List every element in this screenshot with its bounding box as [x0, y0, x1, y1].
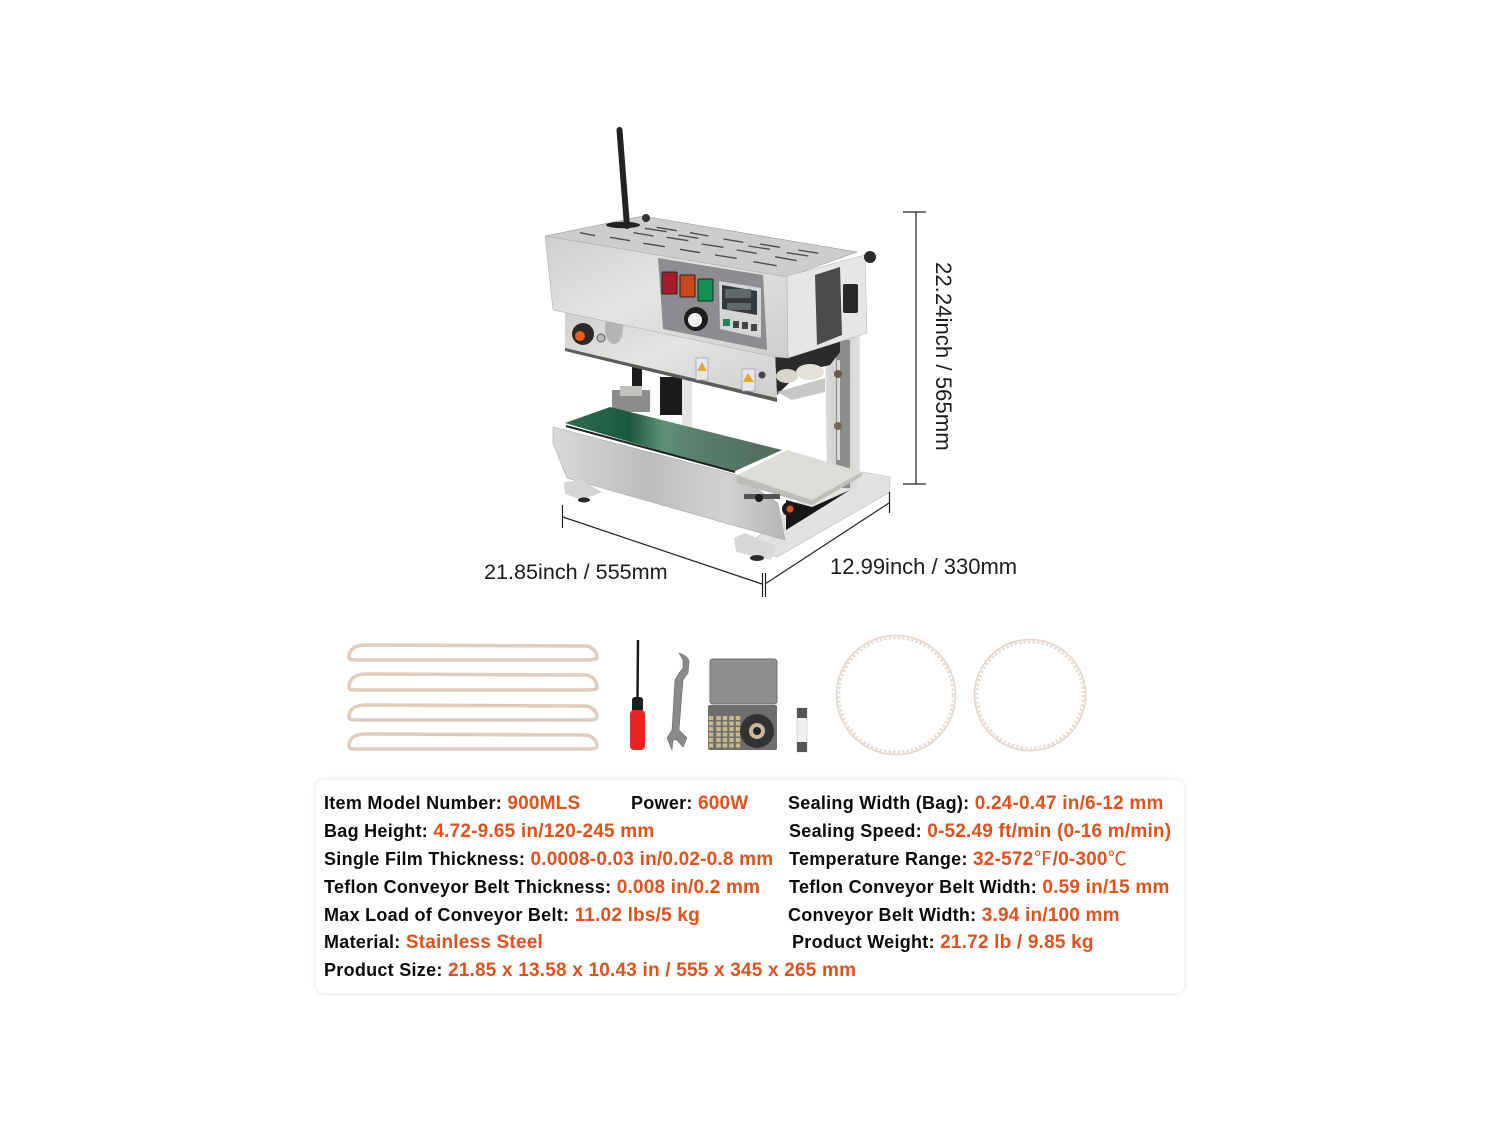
- spec: sealing speed: Sealing Speed: 0-52.49 ft/min (0-16 m/min): [789, 821, 1171, 842]
- spec: product weight: Product Weight: 21.72 lb / 9.85 kg: [792, 932, 1094, 953]
- heat roller assembly: [775, 337, 840, 400]
- accessory: wrench: [667, 653, 689, 750]
- conveyor side body: [553, 427, 785, 540]
- temperature controller: [719, 281, 761, 338]
- antenna rod: [620, 130, 627, 226]
- smudge on lower panel: [605, 312, 623, 344]
- spec: bag height: Bag Height: 4.72-9.65 in/120-245 mm: [324, 821, 654, 842]
- dimension: length: [484, 505, 762, 597]
- roller knob and switch box: [744, 490, 850, 530]
- right end face: [787, 255, 867, 358]
- machine: band sealer: [545, 130, 890, 561]
- heat switch: [680, 275, 695, 297]
- feed table: [737, 450, 862, 505]
- rear column and gear: [612, 367, 692, 428]
- control panel: [658, 258, 767, 350]
- spec: item model number: Item Model Number: 900MLS: [324, 793, 580, 814]
- accessory: type set box: [708, 659, 777, 750]
- accessory: small timing belt: [974, 640, 1086, 750]
- spec: sealing width: Sealing Width (Bag): 0.24-0.47 in/6-12 mm: [788, 793, 1164, 814]
- spec: film thickness: Single Film Thickness: 0.0008-0.03 in/0.02-0.8 mm: [324, 849, 773, 870]
- specification card: [316, 780, 1184, 993]
- right support column: [825, 335, 860, 490]
- spec: material: Material: Stainless Steel: [324, 932, 543, 953]
- rear knob: [864, 251, 876, 263]
- accessory: fuse: [797, 708, 807, 752]
- spec: temperature range: Temperature Range: 32-572℉/0-300℃: [789, 849, 1127, 870]
- conveyor feet: [564, 480, 776, 561]
- base plate: [745, 472, 890, 557]
- accessory: large timing belt: [836, 636, 956, 754]
- temperature dial: [684, 307, 708, 331]
- top face with slots: [545, 214, 857, 277]
- power switch: [662, 272, 677, 294]
- accessory: screwdriver: [630, 640, 645, 750]
- power socket: [843, 284, 858, 313]
- dimension: width: [765, 492, 1017, 597]
- dimension: width: 12.99inch / 330mm: [830, 554, 1017, 579]
- spec: product size: Product Size: 21.85 x 13.58 x 10.43 in / 555 x 345 x 265 mm: [324, 960, 856, 981]
- warning labels: [696, 358, 766, 391]
- lower housing panel: [565, 311, 777, 400]
- conveyor belt: [565, 407, 782, 472]
- accessories: sealing belts: [349, 645, 597, 749]
- spec: power: Power: 600W: [631, 793, 748, 814]
- spec: max load: Max Load of Conveyor Belt: 11.02 lbs/5 kg: [324, 905, 700, 926]
- front face of housing: [545, 236, 788, 358]
- dimension: height: 22.24inch / 565mm: [931, 262, 956, 451]
- rating label: [815, 267, 842, 345]
- motor switch: [698, 279, 713, 301]
- spec: conveyor belt width: Conveyor Belt Width: 3.94 in/100 mm: [788, 905, 1120, 926]
- spec: teflon belt width: Teflon Conveyor Belt Width: 0.59 in/15 mm: [789, 877, 1170, 898]
- spec: teflon belt thickness: Teflon Conveyor Belt Thickness: 0.008 in/0.2 mm: [324, 877, 760, 898]
- dimension: length: 21.85inch / 555mm: [484, 559, 668, 584]
- orange locking knob: [572, 323, 605, 345]
